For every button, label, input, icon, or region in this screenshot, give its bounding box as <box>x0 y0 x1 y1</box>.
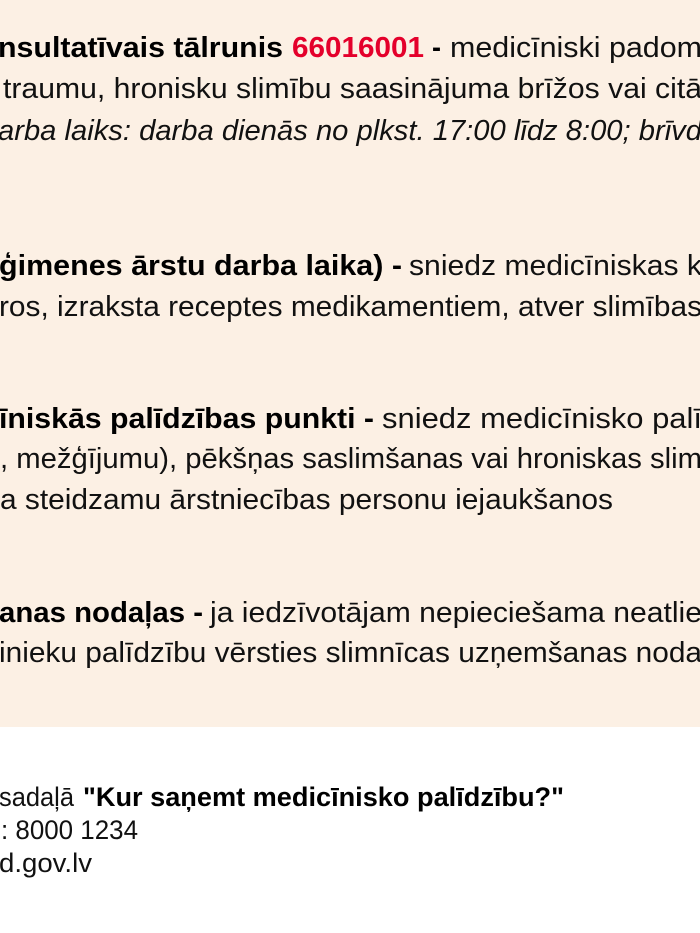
text block: admission departments: inieku palīdzību vērsties slimnīcas uzņemšanas noda <box>0 637 700 669</box>
text block: further information footer: "Kur saņemt medicīnisko palīdzību?" <box>83 782 564 812</box>
text block: emergency aid points: īniskās palīdzības punkti - <box>0 403 374 435</box>
text block: emergency aid points: a steidzamu ārstniecības personu iejaukšanos <box>0 484 613 516</box>
text block: further information footer: : 8000 1234 <box>1 815 138 845</box>
text block: further information footer <box>0 782 564 878</box>
text block: consultation phone line: arba laiks: darba dienās no plkst. 17:00 līdz 8:00; brīvd <box>0 115 700 147</box>
text block: consultation phone line: traumu, hronisku slimību saasinājuma brīžos vai citā <box>3 73 700 105</box>
text block: family doctors: ģimenes ārstu darba laika) - <box>0 250 402 282</box>
panel: beige background <box>0 0 700 727</box>
text block: emergency aid points: , mežģījumu), pēkšņas saslimšanas vai hroniskas slim <box>0 443 700 475</box>
text block: consultation phone line <box>0 32 700 147</box>
text block: consultation phone line: 66016001 <box>292 32 424 64</box>
text block: emergency aid points: sniedz medicīnisko palī <box>382 403 700 435</box>
text block: consultation phone line: - <box>432 32 441 64</box>
text block: emergency aid points <box>0 403 700 516</box>
text block: admission departments: anas nodaļas - <box>0 597 203 629</box>
text block: family doctors: ros, izraksta receptes medikamentiem, atver slimības <box>0 291 700 323</box>
text block: admission departments: ja iedzīvotājam nepieciešama neatlie <box>209 597 700 629</box>
text block: family doctors <box>0 250 700 323</box>
text block: family doctors: sniedz medicīniskas k <box>409 250 700 282</box>
text block: consultation phone line: nsultatīvais tālrunis <box>0 32 283 64</box>
text block: further information footer: sadaļā <box>0 782 75 812</box>
text block: further information footer: d.gov.lv <box>0 848 93 878</box>
text block: admission departments <box>0 597 700 669</box>
text block: consultation phone line: medicīniski padom <box>450 32 700 64</box>
